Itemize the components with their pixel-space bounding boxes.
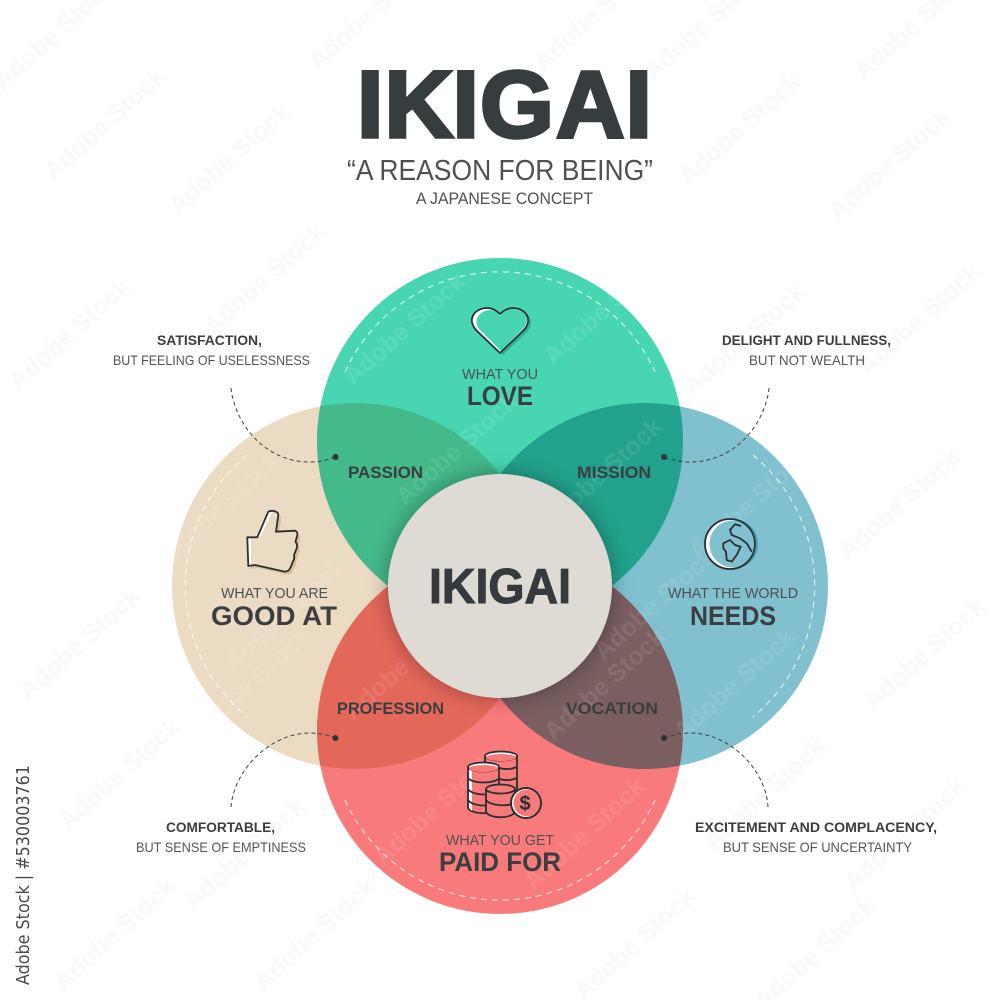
callout: delight [722, 333, 891, 368]
text: what the world needs: NEEDS [690, 601, 776, 631]
shadow of center circle [386, 472, 614, 700]
watermark background: Adobe Stock [199, 217, 331, 341]
callout: satisfaction [113, 333, 310, 368]
text: what you get paid for: WHAT YOU GET [446, 832, 554, 849]
watermark background: Adobe Stock [854, 257, 986, 381]
watermark on circles: Adobe Stock [219, 552, 351, 676]
watermark on circles: Adobe Stock [589, 542, 721, 666]
watermark on circles: Adobe Stock [391, 387, 523, 511]
watermark background: Adobe Stock [699, 732, 831, 856]
watermark on circles: Adobe Stock [184, 622, 316, 746]
label: vocation: VOCATION [566, 700, 658, 718]
watermark background: Adobe Stock [839, 772, 971, 896]
icon: thumbs up [247, 511, 300, 575]
watermark background: Adobe Stock [54, 712, 186, 836]
circle: what you love [317, 258, 683, 624]
title: IKIGAI [357, 52, 652, 158]
icon: heart [472, 308, 531, 355]
watermark background: Adobe Stock [824, 102, 956, 226]
watermark on circles: Adobe Stock [536, 412, 668, 536]
overlap: vocation [500, 586, 683, 769]
circle: what you are good at [172, 403, 538, 769]
watermark background: Adobe Stock [179, 792, 311, 916]
watermark on circles: Adobe Stock [339, 602, 471, 726]
watermark background: Adobe Stock [4, 272, 136, 396]
center label: IKIGAI [429, 560, 571, 614]
watermark background: Adobe Stock [49, 872, 181, 996]
watermark on circles: Adobe Stock [369, 747, 501, 871]
watermark background: Adobe Stock [14, 582, 146, 706]
connector: profession callout [231, 733, 338, 807]
watermark background: Adobe Stock [674, 67, 806, 191]
subtitle: “A REASON FOR BEING” [347, 155, 653, 187]
text: what you are good at: GOOD AT [211, 601, 338, 631]
callout: comfortable: BUT SENSE OF EMPTINESS [136, 839, 306, 855]
overlap: mission [500, 403, 683, 586]
callout: excitement: EXCITEMENT AND COMPLACENCY, [695, 820, 937, 835]
connector: vocation callout [661, 733, 768, 807]
watermark background: Adobe Stock [249, 872, 381, 996]
callout: comfortable [136, 820, 306, 855]
icon: coins with dollar: $ [519, 793, 531, 815]
watermark on circles: Adobe Stock [539, 247, 671, 371]
text: what you get paid for: PAID FOR [439, 847, 561, 877]
label: mission: MISSION [577, 464, 651, 482]
watermark on circles: Adobe Stock [339, 267, 471, 391]
callout: delight: BUT NOT WEALTH [749, 352, 865, 368]
text: what you love: WHAT YOU [462, 366, 538, 383]
subtitle: a Japanese concept: A JAPANESE CONCEPT [416, 189, 593, 208]
watermark on circles [154, 247, 816, 896]
callout: excitement: BUT SENSE OF UNCERTAINTY [723, 839, 913, 855]
icon: globe [705, 519, 758, 569]
dashed inner arcs [185, 272, 815, 900]
watermark background: Adobe Stock [39, 62, 171, 186]
callout: satisfaction: SATISFACTION, [157, 333, 262, 348]
text: what you are good at [211, 585, 338, 631]
watermark on circles: Adobe Stock [154, 447, 286, 571]
watermark background: Adobe Stock [834, 442, 966, 566]
watermark background: Adobe Stock [859, 592, 991, 716]
overlap: profession [317, 586, 500, 769]
label: profession: PROFESSION [337, 700, 444, 718]
watermark on circles: Adobe Stock [519, 772, 651, 896]
text: what you love: LOVE [467, 381, 533, 411]
text: what the world needs: WHAT THE WORLD [668, 585, 798, 602]
label: passion: PASSION [348, 464, 423, 482]
callout: delight: DELIGHT AND FULLNESS, [722, 333, 891, 348]
watermark on circles: Adobe Stock [669, 622, 801, 746]
circle: what the world needs [462, 403, 828, 769]
text: what you get paid for [439, 832, 561, 877]
stock id label: Adobe Stock | #530003761 [13, 765, 34, 985]
callout: comfortable: COMFORTABLE, [166, 820, 275, 835]
text: what the world needs [668, 585, 798, 631]
center circle [388, 474, 612, 698]
circle: what you get paid for [317, 548, 683, 914]
watermark background: Adobe Stock [679, 277, 811, 401]
venn diagram [172, 258, 828, 914]
text: what you are good at: WHAT YOU ARE [221, 585, 328, 602]
overlap: passion [317, 403, 500, 586]
text: what you love [462, 366, 538, 411]
watermark on circles: Adobe Stock [539, 622, 671, 746]
connector: mission callout [661, 388, 769, 462]
watermark on circles: Adobe Stock [684, 442, 816, 566]
watermark background: Adobe Stock [164, 97, 296, 221]
icon: coins with dollar [468, 752, 541, 818]
callout: excitement [695, 820, 937, 855]
callout: satisfaction: BUT FEELING OF USELESSNESS [113, 352, 310, 368]
connector: passion callout [231, 388, 338, 462]
